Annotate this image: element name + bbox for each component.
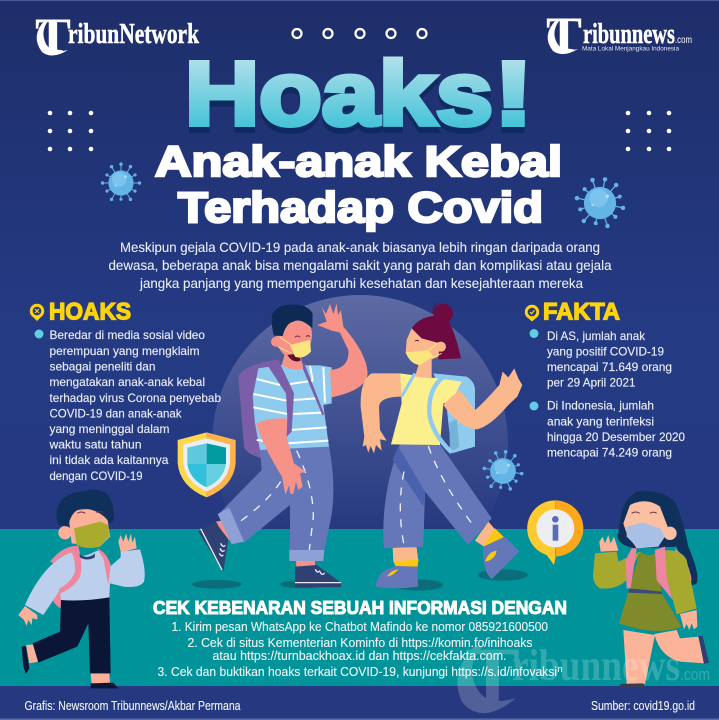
hoaks body text: mengatakan anak-anak kebal xyxy=(50,375,205,389)
logo: Tribunnews.com: T xyxy=(546,6,582,62)
icon: shield xyxy=(178,432,236,497)
dot grid right xyxy=(626,111,671,151)
cek steps text: atau https://turnbackhoax.id dan https://cekfakta.com. xyxy=(212,649,506,663)
icon: info pin xyxy=(527,500,583,565)
logo: TribunNetwork: T xyxy=(35,7,71,63)
icon: fakta check pin xyxy=(525,305,539,322)
cek steps text: n xyxy=(558,664,563,674)
fakta text one: yang positif COVID-19 xyxy=(547,344,664,358)
hoaks body text: waktu satu tahun xyxy=(48,438,141,452)
cek steps text xyxy=(158,620,563,679)
boy xyxy=(198,303,368,587)
watermark: tribunnews xyxy=(457,630,710,720)
watermark: tribunnews: .com xyxy=(680,665,710,684)
hoaks body text: yang meninggal dalam xyxy=(50,422,170,436)
title: Hoaks!: Hoaks xyxy=(185,50,493,150)
hoaks body text: perempuan yang mengklaim xyxy=(50,344,200,358)
girl xyxy=(361,303,522,588)
logo: Tribunnews.com xyxy=(546,6,692,62)
subtitle xyxy=(155,138,562,232)
halo circle behind children xyxy=(212,295,508,591)
icon: virus right xyxy=(571,173,630,230)
watermark: tribunnews: ribunnews xyxy=(512,641,680,690)
hoaks body text: sebagai peneliti dan xyxy=(50,360,156,374)
teal ground band xyxy=(0,529,719,686)
fakta text two: Di Indonesia, jumlah xyxy=(547,398,654,412)
fakta text two xyxy=(547,398,685,460)
hoaks body text xyxy=(48,328,221,483)
cek steps text: 2. Cek di situs Kementerian Kominfo di https://komin.fo/inihoaks xyxy=(188,636,532,650)
intro text: dewasa, beberapa anak bisa mengalami sakit yang parah dan komplikasi atau gejala xyxy=(108,257,612,273)
icon: virus left xyxy=(101,163,141,201)
fakta text one xyxy=(547,329,672,390)
bullet one xyxy=(530,329,538,338)
logo: TribunNetwork: ribunNetwork xyxy=(68,18,200,50)
illustration: boy and girl elbow bump xyxy=(192,303,528,591)
title: Hoaks!: Hoaks xyxy=(185,44,493,144)
cek steps text: 1. Kirim pesan WhatsApp ke Chatbot Mafindo ke nomor 085921600500 xyxy=(172,620,548,634)
title: Hoaks!: ! xyxy=(494,50,533,150)
intro text xyxy=(108,239,612,291)
heading: FAKTA: FAKTA xyxy=(543,298,620,326)
hoaks body text: dengan COVID-19 xyxy=(50,469,143,483)
footer credit: Grafis: Newsroom Tribunnews/Akbar Permana xyxy=(24,699,241,713)
footer band xyxy=(0,686,719,720)
bullet two xyxy=(530,402,538,410)
hoaks body text: terhadap virus Corona penyebab xyxy=(50,391,221,405)
logo: TribunNetwork xyxy=(35,7,200,63)
illustration: left child xyxy=(18,490,145,688)
logo: Tribunnews.com: ribunnews xyxy=(583,18,675,50)
icon: virus centre xyxy=(481,448,526,492)
hoaks body text: ini tidak ada kaitannya xyxy=(50,453,169,467)
title: Hoaks!: ! xyxy=(494,44,533,144)
ground shadows xyxy=(192,569,528,591)
intro text: jangka panjang yang mempengaruhi kesehatan dan kesejahteraan mereka xyxy=(139,275,583,291)
logo: Tribunnews.com: Mata Lokal Menjangkau Indonesia xyxy=(582,46,679,52)
panel: fakta xyxy=(525,298,685,460)
heading: HOAKS: HOAKS xyxy=(49,298,131,326)
bullet xyxy=(34,330,44,338)
logo: Tribunnews.com: .com xyxy=(675,35,692,46)
fakta text two: hingga 20 Desember 2020 xyxy=(547,430,685,444)
fakta text two: mencapai 74.249 orang xyxy=(547,446,672,460)
hoaks body text: Beredar di media sosial video xyxy=(50,328,205,342)
fakta text two: anak yang terinfeksi xyxy=(547,414,654,428)
icon: hoaks x pin xyxy=(30,304,44,321)
heading: cek kebenaran: CEK KEBENARAN SEBUAH INFORMASI DENGAN xyxy=(153,598,567,618)
panel: hoaks xyxy=(30,298,221,483)
intro text: Meskipun gejala COVID-19 pada anak-anak biasanya lebih ringan daripada orang xyxy=(120,239,600,255)
footer source: Sumber: covid19.go.id xyxy=(591,699,695,713)
subtitle: Anak-anak Kebal xyxy=(155,138,562,186)
subtitle: Terhadap Covid xyxy=(178,184,543,232)
hoaks body text: COVID-19 dan anak-anak xyxy=(50,406,182,420)
fakta text one: Di AS, jumlah anak xyxy=(547,329,646,343)
dot grid left xyxy=(48,111,93,151)
fakta text one: mencapai 71.649 orang xyxy=(547,360,672,374)
illustration: right child xyxy=(593,491,709,688)
fakta text one: per 29 April 2021 xyxy=(547,376,636,390)
decorative ring row xyxy=(292,29,426,38)
cek steps text: 3. Cek dan buktikan hoaks terkait COVID-19, kunjungi https://s.id/infovaksi xyxy=(158,665,557,679)
